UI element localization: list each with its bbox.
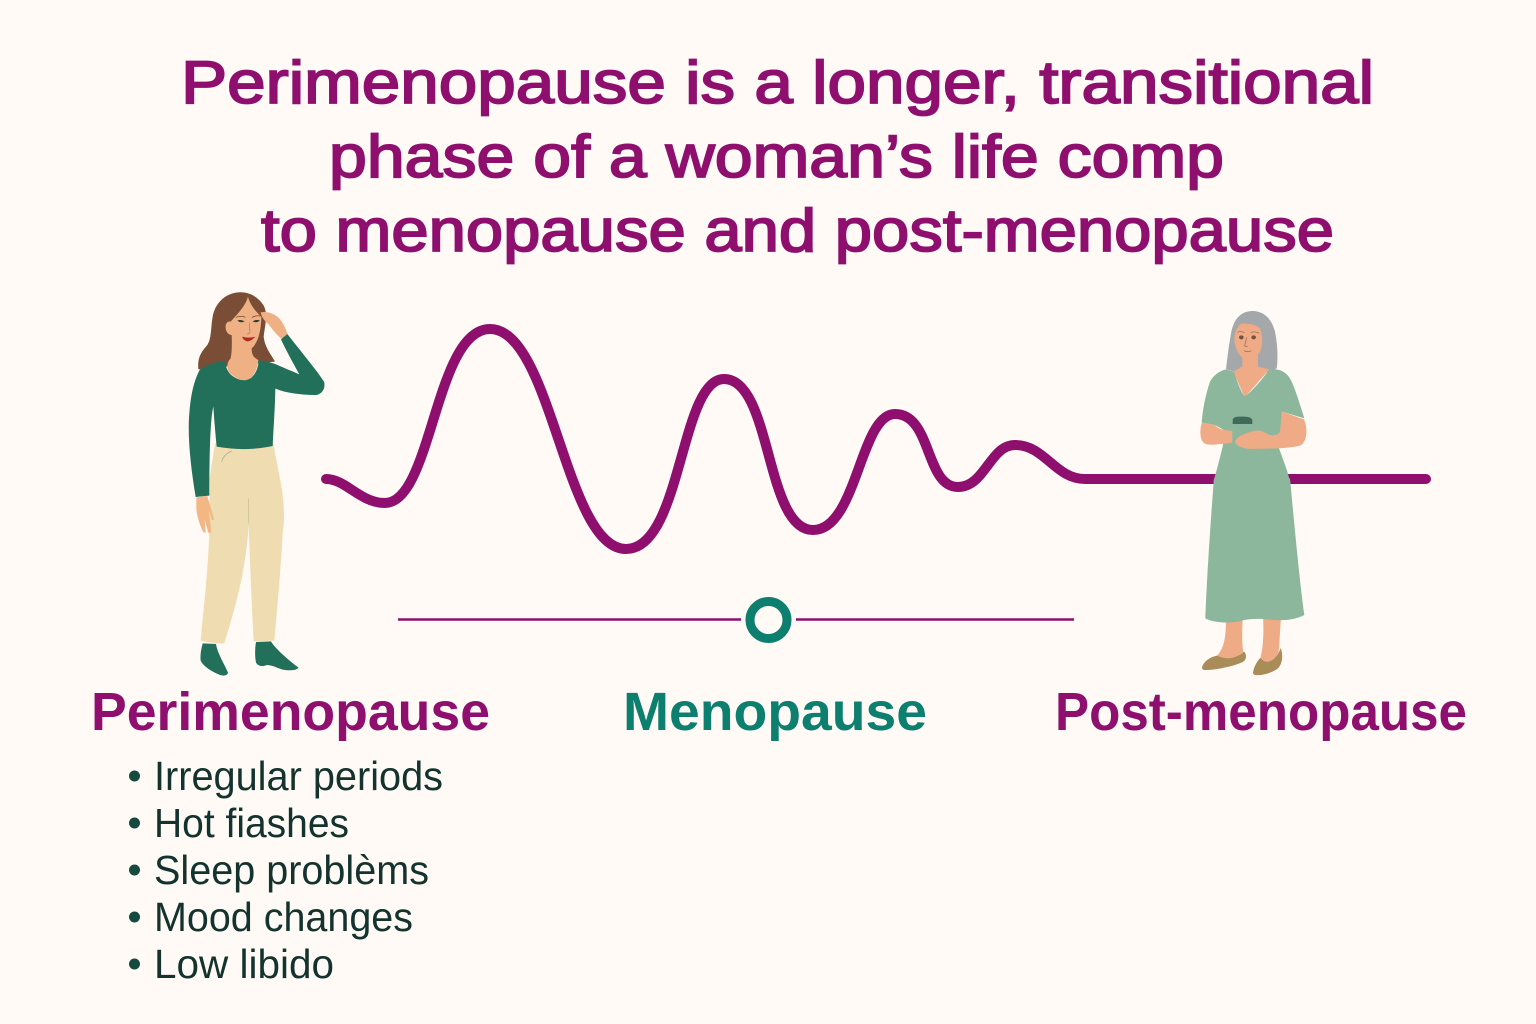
symptom: hot flashes: Hot fiashes bbox=[154, 800, 349, 846]
hormone wave line bbox=[326, 329, 1426, 549]
older woman lower body bbox=[1202, 478, 1304, 675]
stage label: Post-menopause: Post-menopause bbox=[1055, 682, 1467, 742]
figure: post-menopausal woman bbox=[1200, 311, 1306, 675]
stage label: Menopause: Menopause bbox=[623, 682, 927, 742]
woman upper body and trousers bbox=[189, 292, 324, 644]
symptom: irregular periods: Irregular periods bbox=[154, 753, 443, 799]
figure: perimenopausal woman bbox=[189, 292, 324, 676]
title: to menopause and post-menopause bbox=[261, 197, 1334, 264]
timeline bbox=[398, 602, 1074, 638]
symptom: low libido: Low libido bbox=[154, 941, 334, 987]
woman hand and boots bbox=[196, 496, 298, 676]
symptom list bbox=[129, 753, 443, 987]
symptom: sleep problems: Sleep problèms bbox=[154, 847, 429, 893]
title bbox=[181, 49, 1374, 264]
stage label: Perimenopause: Perimenopause bbox=[91, 682, 490, 742]
menopause marker bbox=[750, 602, 787, 638]
title: phase of a woman’s life comp bbox=[329, 123, 1224, 190]
older woman upper body bbox=[1200, 311, 1306, 482]
title: Perimenopause is a longer, transitional bbox=[181, 49, 1374, 116]
symptom: mood changes: Mood changes bbox=[154, 894, 413, 940]
